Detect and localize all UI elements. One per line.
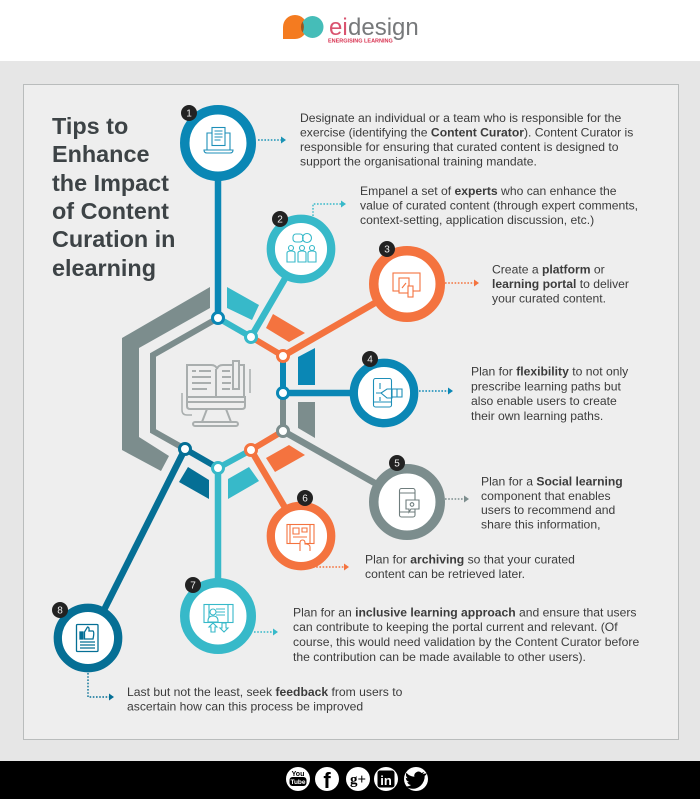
badge 3: 3 xyxy=(384,244,390,256)
badge 6: 6 xyxy=(302,494,308,504)
icon: tablet with hand xyxy=(287,524,314,551)
text 4: also enable users to create xyxy=(471,394,617,408)
icon: phone with message xyxy=(400,488,419,517)
icon: presenter with arrows xyxy=(204,604,233,632)
circle 3 xyxy=(374,251,440,317)
text 8: Last but not the least, seek feedback from users to xyxy=(127,685,403,699)
text 2: Empanel a set of experts who can enhance the xyxy=(360,184,617,198)
accent segments xyxy=(179,287,315,499)
step 4 xyxy=(354,351,629,423)
circle 1 xyxy=(185,110,251,176)
text 8 xyxy=(127,685,403,714)
badge 7: 7 xyxy=(190,580,196,592)
text 7: can contribute to keeping the portal current and relevant. (Of xyxy=(293,620,618,634)
text 4: their own learning paths. xyxy=(471,409,603,423)
title xyxy=(52,113,175,281)
logo: eidesign: ei xyxy=(329,14,348,41)
text 5: users to recommend and xyxy=(481,503,615,517)
badge 8: 8 xyxy=(57,606,63,616)
text 4 xyxy=(471,364,629,423)
arrow 3 xyxy=(445,280,479,286)
arrow 4 xyxy=(419,388,453,394)
icon: laptop with document xyxy=(204,128,233,153)
text 1: Designate an individual or a team who is responsible for the xyxy=(300,111,621,125)
icon: LinkedIn xyxy=(374,767,398,791)
step 7 xyxy=(185,577,639,664)
circle 5 xyxy=(374,469,440,535)
title: Tips to xyxy=(52,113,128,139)
text 3: your curated content. xyxy=(492,292,606,306)
outer thick grey bracket xyxy=(122,287,210,471)
text 6: content can be retrieved later. xyxy=(365,567,525,581)
text 2 xyxy=(360,184,638,227)
arrow 7 xyxy=(254,628,278,636)
text 3: learning portal to deliver xyxy=(492,277,629,291)
text 5: share this information, xyxy=(481,518,600,532)
icon: Facebook xyxy=(315,767,339,793)
circle 7 xyxy=(185,583,251,649)
inner thin grey bracket xyxy=(153,318,218,449)
circle 2 xyxy=(271,219,331,279)
text 1: responsible for ensuring that curated content is designed to xyxy=(300,140,619,154)
text 3: Create a platform or xyxy=(492,262,605,276)
badge 2 xyxy=(272,211,288,227)
badge 2: 2 xyxy=(277,214,283,226)
logo: eidesign xyxy=(283,14,419,44)
icon: Facebook: f xyxy=(323,768,331,793)
arrow 6 xyxy=(313,564,349,570)
icon: Google Plus: g+ xyxy=(350,772,366,788)
badge 4: 4 xyxy=(367,354,373,366)
icon: group of people xyxy=(287,234,316,262)
badge 7 xyxy=(185,577,201,593)
text 7: the contribution can be made available to other users). xyxy=(293,650,586,664)
step 8 xyxy=(52,602,403,714)
text 1 xyxy=(300,111,633,168)
text 5: component that enables xyxy=(481,489,611,503)
panel: main background xyxy=(24,84,678,740)
circle 6 xyxy=(271,506,331,566)
spokes linking hub to numbered circles xyxy=(103,170,380,612)
text 4: prescribe learning paths but xyxy=(471,380,621,394)
badge 1: 1 xyxy=(186,108,192,120)
icon: devices xyxy=(393,273,420,297)
title: elearning xyxy=(52,255,156,281)
badge 3 xyxy=(379,241,395,257)
social icons xyxy=(286,767,428,793)
text 5: Plan for a Social learning xyxy=(481,474,623,488)
junction nodes xyxy=(180,312,288,474)
title: Curation in xyxy=(52,226,175,252)
step 6 xyxy=(271,490,575,581)
step 1 xyxy=(181,105,633,176)
text 2: value of curated content (through expert comments, xyxy=(360,198,638,212)
text 1: exercise (identifying the Content Curator). Content Curator is xyxy=(300,126,633,140)
arrow 5 xyxy=(445,496,469,502)
step 3 xyxy=(374,241,629,317)
text 4: Plan for flexibility to not only xyxy=(471,364,629,378)
title: Enhance xyxy=(52,141,150,167)
arrow 8 xyxy=(88,673,114,700)
text 1: support the organisational training mandate. xyxy=(300,154,537,168)
logo: eidesign: design xyxy=(348,14,419,41)
step 5 xyxy=(374,455,623,535)
text 8: ascertain how can this process be improved xyxy=(127,700,363,714)
icon: feedback thumbs up xyxy=(76,624,98,652)
badge 1 xyxy=(181,105,197,121)
icon: YouTube xyxy=(286,767,310,791)
badge 5: 5 xyxy=(394,458,400,470)
footer bar xyxy=(0,761,700,799)
text 2: context-setting, application discussion, etc.) xyxy=(360,213,594,227)
text 6: Plan for archiving so that your curated xyxy=(365,552,575,566)
circle 4 xyxy=(354,363,414,423)
arrow 1 xyxy=(258,136,286,144)
arrow 2 xyxy=(313,200,346,216)
circle 8 xyxy=(58,608,118,668)
text 7: course, this would need validation by the Content Curator before xyxy=(293,635,639,649)
badge 5 xyxy=(389,455,405,471)
badge 4 xyxy=(362,351,378,367)
icon: phone with learning paths xyxy=(374,378,402,407)
badge 8 xyxy=(52,602,68,618)
text 6 xyxy=(365,552,575,581)
icon: Twitter xyxy=(404,767,428,791)
hexagon edges xyxy=(185,318,283,468)
icon: LinkedIn: in xyxy=(380,773,392,788)
title: the Impact xyxy=(52,170,169,196)
icon: YouTube: You xyxy=(292,771,304,778)
icon: YouTube: Tube xyxy=(290,779,306,786)
text 7: Plan for an inclusive learning approach and ensure that users xyxy=(293,606,636,620)
badge 6 xyxy=(297,490,313,506)
step 2 xyxy=(271,184,638,279)
central hexagon hub xyxy=(103,170,380,612)
logo: eidesign: ENERGISING LEARNING xyxy=(328,38,393,44)
icon: Google Plus xyxy=(346,767,370,791)
text 7 xyxy=(293,606,639,664)
title: of Content xyxy=(52,198,169,224)
text 3 xyxy=(492,262,629,306)
icon: book on monitor xyxy=(182,361,250,426)
text 5 xyxy=(481,474,623,532)
